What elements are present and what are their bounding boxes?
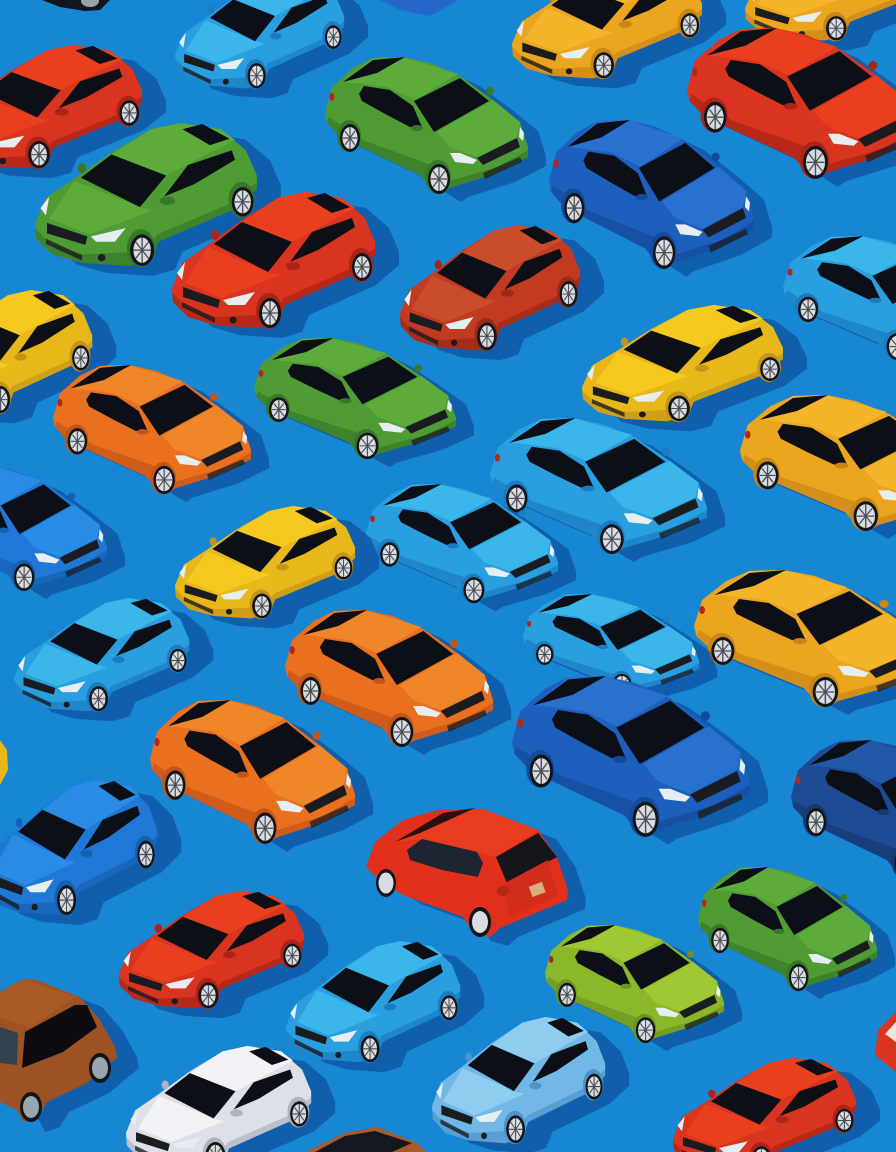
car: yellow left edge (0, 290, 116, 423)
car: yellow center left (175, 506, 379, 628)
car: pale blue bottom (432, 1017, 629, 1152)
car: navy right edge (791, 740, 896, 887)
car: red hatchback rear view (366, 808, 586, 946)
car sliver: blue top (380, 0, 458, 16)
car: green top center (325, 57, 546, 202)
car: green center (254, 338, 474, 467)
car: light blue center right (490, 418, 725, 562)
car: cyan small right (523, 594, 717, 704)
car: red top left (0, 45, 166, 178)
car sliver: red right edge (875, 1012, 896, 1072)
car: amber top right (745, 0, 896, 50)
car: cyan center (366, 484, 576, 611)
car: yellow top (512, 0, 726, 88)
car: orange left (53, 365, 269, 502)
car: orange center (285, 610, 511, 755)
car: rust red (400, 225, 604, 360)
car: orange lower left (150, 700, 373, 852)
car: red lower left (119, 891, 328, 1018)
car: red upper center (172, 192, 399, 338)
car: white bottom (126, 1046, 335, 1152)
car: blue top (175, 0, 368, 98)
car: blue upper right (549, 120, 772, 277)
car: red top right (687, 28, 896, 187)
car: dark blue large (512, 676, 768, 845)
car sliver: yellow left edge (0, 740, 8, 785)
car: red bottom right (673, 1058, 880, 1152)
car: blue bottom center (286, 941, 484, 1072)
car sliver: dark top (42, 0, 110, 11)
car: blue left edge (0, 465, 125, 599)
car: amber right edge (740, 395, 896, 539)
car: yellow right (582, 305, 807, 431)
car sliver: brown bottom (305, 1127, 427, 1152)
car: lime (545, 925, 742, 1051)
car: green upper left (35, 123, 281, 276)
car: amber right (694, 570, 896, 715)
car: light blue right edge (783, 236, 896, 368)
car: light blue left (14, 598, 213, 721)
car: blue lower left (0, 780, 181, 925)
car: green lower right (698, 867, 895, 999)
car: brown (0, 979, 139, 1132)
